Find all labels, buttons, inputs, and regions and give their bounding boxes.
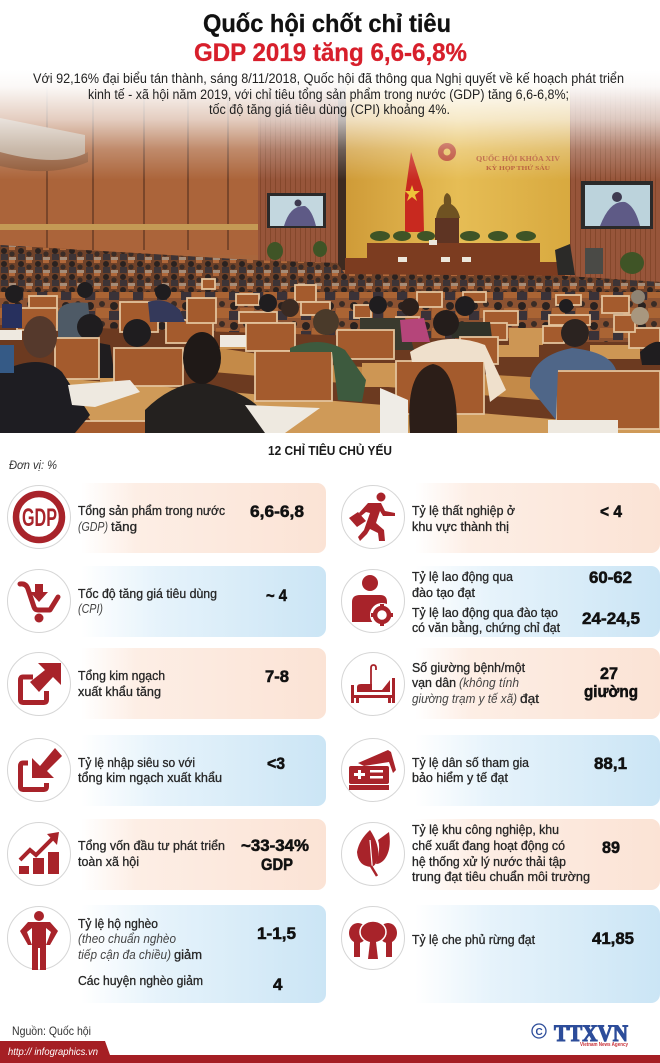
- panel: forest cover: Tỷ lệ che phủ rừng đạt: [412, 932, 535, 947]
- panel: health insurance: [342, 735, 660, 806]
- icon: insurance card: [349, 750, 396, 790]
- panel: exports: 7-8: [265, 667, 289, 686]
- panel: import ratio: Tỷ lệ nhập siêu so với: [78, 755, 195, 770]
- panel: GDP: Tổng sản phẩm trong nước: [78, 503, 225, 518]
- panel: hospital beds: (không tính: [459, 675, 519, 690]
- flag: [405, 152, 424, 232]
- title: [194, 10, 467, 67]
- panel: forest cover: 41,85: [592, 929, 634, 948]
- section heading: 12 CHỈ TIÊU CHỦ YẾU: [268, 443, 392, 458]
- panel: unemployment: khu vực thành thị: [412, 519, 509, 534]
- plants: [267, 231, 644, 274]
- logo: TTXVN: TTXVN: [554, 1021, 628, 1046]
- panel: poverty: giảm: [174, 947, 202, 962]
- intro text: Với 92,16% đại biểu tán thành, sáng 8/11/2018, Quốc hội đã thông qua Nghị quyết về kế hoạch phát triển: [33, 71, 624, 86]
- panel: trained labour: 60-62: [589, 568, 632, 587]
- panel: CPI: (CPI): [78, 601, 103, 616]
- panel: investment: Tổng vốn đầu tư phát triển: [78, 838, 225, 853]
- icon: running man: [349, 492, 395, 541]
- audience floor: [2, 245, 658, 344]
- logo: TTXVN: [532, 1021, 628, 1048]
- panel: exports: [8, 648, 326, 719]
- icon: cart: [20, 584, 58, 622]
- panel: investment: [8, 819, 326, 890]
- panel: unemployment: Tỷ lệ thất nghiệp ở: [412, 503, 515, 518]
- left screen: [267, 193, 326, 228]
- seated people mid rows: [2, 282, 660, 378]
- source: Nguồn: Quốc hội: [12, 1024, 91, 1038]
- panel: investment: GDP: [261, 855, 293, 874]
- icon: GDP: [16, 494, 62, 540]
- front row people: [0, 309, 616, 433]
- panel: investment: toàn xã hội: [78, 854, 139, 869]
- icon: leaves: [357, 830, 390, 876]
- panel: wastewater: chế xuất đang hoạt động có: [412, 838, 565, 853]
- icon: GDP: GDP: [22, 504, 57, 532]
- footer bar: [0, 1041, 660, 1063]
- title second line: GDP 2019 tăng 6,6-6,8%: [194, 39, 467, 67]
- panel: trained labour: đào tạo đạt: [412, 585, 475, 600]
- panel: poverty: 4: [273, 975, 283, 994]
- panel: hospital beds: vạn dân: [412, 675, 456, 690]
- panel: forest cover: [342, 905, 660, 1003]
- panel: hospital beds: giường: [584, 682, 638, 701]
- photo: National Assembly hall: [0, 70, 660, 435]
- panel: hospital beds: 27: [600, 664, 618, 683]
- desk papers: [0, 330, 618, 433]
- panel: hospital beds: giường trạm y tế xã): [412, 691, 517, 706]
- icon: import arrow: [20, 748, 62, 790]
- panel: wastewater: hệ thống xử lý nước thải tập: [412, 854, 566, 869]
- footer bar: http:// infographics.vn: [8, 1046, 98, 1058]
- wall inscription: [476, 153, 561, 172]
- icon: trees: [349, 921, 397, 959]
- desk tops: [100, 328, 640, 387]
- wall inscription: QUỐC HỘI KHÓA XIV: [476, 153, 561, 163]
- panel: health insurance: 88,1: [594, 754, 627, 773]
- panel: hospital beds: [342, 648, 660, 719]
- intro text: [33, 71, 624, 117]
- panel: GDP: tăng: [111, 519, 137, 534]
- panel: hospital beds: đạt: [520, 691, 539, 706]
- seats back rows: [17, 279, 660, 348]
- panel: poverty: 1-1,5: [257, 924, 296, 943]
- icon: worker with gear: [352, 575, 394, 627]
- panel: GDP: 6,6-6,8: [250, 502, 304, 521]
- panel: poverty: [8, 905, 326, 1003]
- panel: CPI: [8, 566, 326, 637]
- panel: health insurance: bảo hiểm y tế đạt: [412, 770, 508, 785]
- panel: poverty: Tỷ lệ hộ nghèo: [78, 916, 158, 931]
- back rows of delegates: [1, 245, 660, 292]
- front row seats: [55, 323, 660, 435]
- panel: CPI: ~ 4: [266, 586, 287, 605]
- panel: import ratio: tổng kim ngạch xuất khẩu: [78, 770, 222, 785]
- icon: growth chart: [19, 832, 59, 874]
- panel: trained labour: 24-24,5: [582, 609, 640, 628]
- panel: trained labour: Tỷ lệ lao động qua đào tạo: [412, 605, 558, 620]
- bust and podium: [436, 193, 460, 218]
- cameraman: [555, 244, 575, 275]
- panel: wastewater: trung đạt tiêu chuẩn môi trường: [412, 869, 590, 884]
- panel: exports: xuất khẩu tăng: [78, 684, 161, 699]
- panel: poverty: (theo chuẩn nghèo: [78, 931, 176, 946]
- logo: TTXVN: C: [536, 1027, 543, 1038]
- panel: investment: ~33-34%: [241, 836, 309, 855]
- panel: health insurance: Tỷ lệ dân số tham gia: [412, 755, 530, 770]
- intro text: tốc độ tăng giá tiêu dùng (CPI) khoảng 4%.: [209, 102, 450, 117]
- panel: unemployment: < 4: [600, 502, 622, 521]
- icon: hospital bed: [351, 665, 395, 703]
- panel: import ratio: <3: [267, 754, 285, 773]
- panel: exports: Tổng kim ngạch: [78, 668, 165, 683]
- panel: trained labour: [342, 566, 660, 637]
- panel: CPI: Tốc độ tăng giá tiêu dùng: [78, 586, 217, 601]
- panel: import ratio: [8, 735, 326, 806]
- panel: wastewater: 89: [602, 838, 620, 857]
- logo: TTXVN: Vietnam News Agency: [580, 1042, 628, 1048]
- panel: trained labour: có văn bằng, chứng chỉ đạt: [412, 620, 560, 635]
- icon: export arrow: [20, 663, 61, 702]
- dais: [345, 243, 565, 278]
- icon: person: [20, 911, 58, 970]
- title: Quốc hội chốt chỉ tiêu: [203, 10, 451, 38]
- wall inscription: KỲ HỌP THỨ SÁU: [486, 164, 550, 172]
- right screen: [581, 181, 653, 229]
- panel: GDP: [8, 483, 326, 553]
- panel: poverty: Các huyện nghèo giảm: [78, 973, 203, 988]
- intro text: kinh tế - xã hội năm 2019, với chỉ tiêu tổng sản phẩm trong nước (GDP) tăng 6,6-6,8%;: [88, 87, 569, 102]
- panel: GDP: (GDP): [78, 519, 108, 534]
- panel: trained labour: Tỷ lệ lao động qua: [412, 569, 514, 584]
- emblem: [438, 143, 456, 161]
- panel: unemployment: [342, 483, 660, 553]
- panel: hospital beds: Số giường bệnh/một: [412, 660, 525, 675]
- unit note: Đơn vị: %: [9, 458, 57, 472]
- panel: wastewater: Tỷ lệ khu công nghiệp, khu: [412, 822, 559, 837]
- panel: poverty: tiếp cận đa chiều): [78, 947, 171, 962]
- panel: wastewater: [342, 819, 660, 890]
